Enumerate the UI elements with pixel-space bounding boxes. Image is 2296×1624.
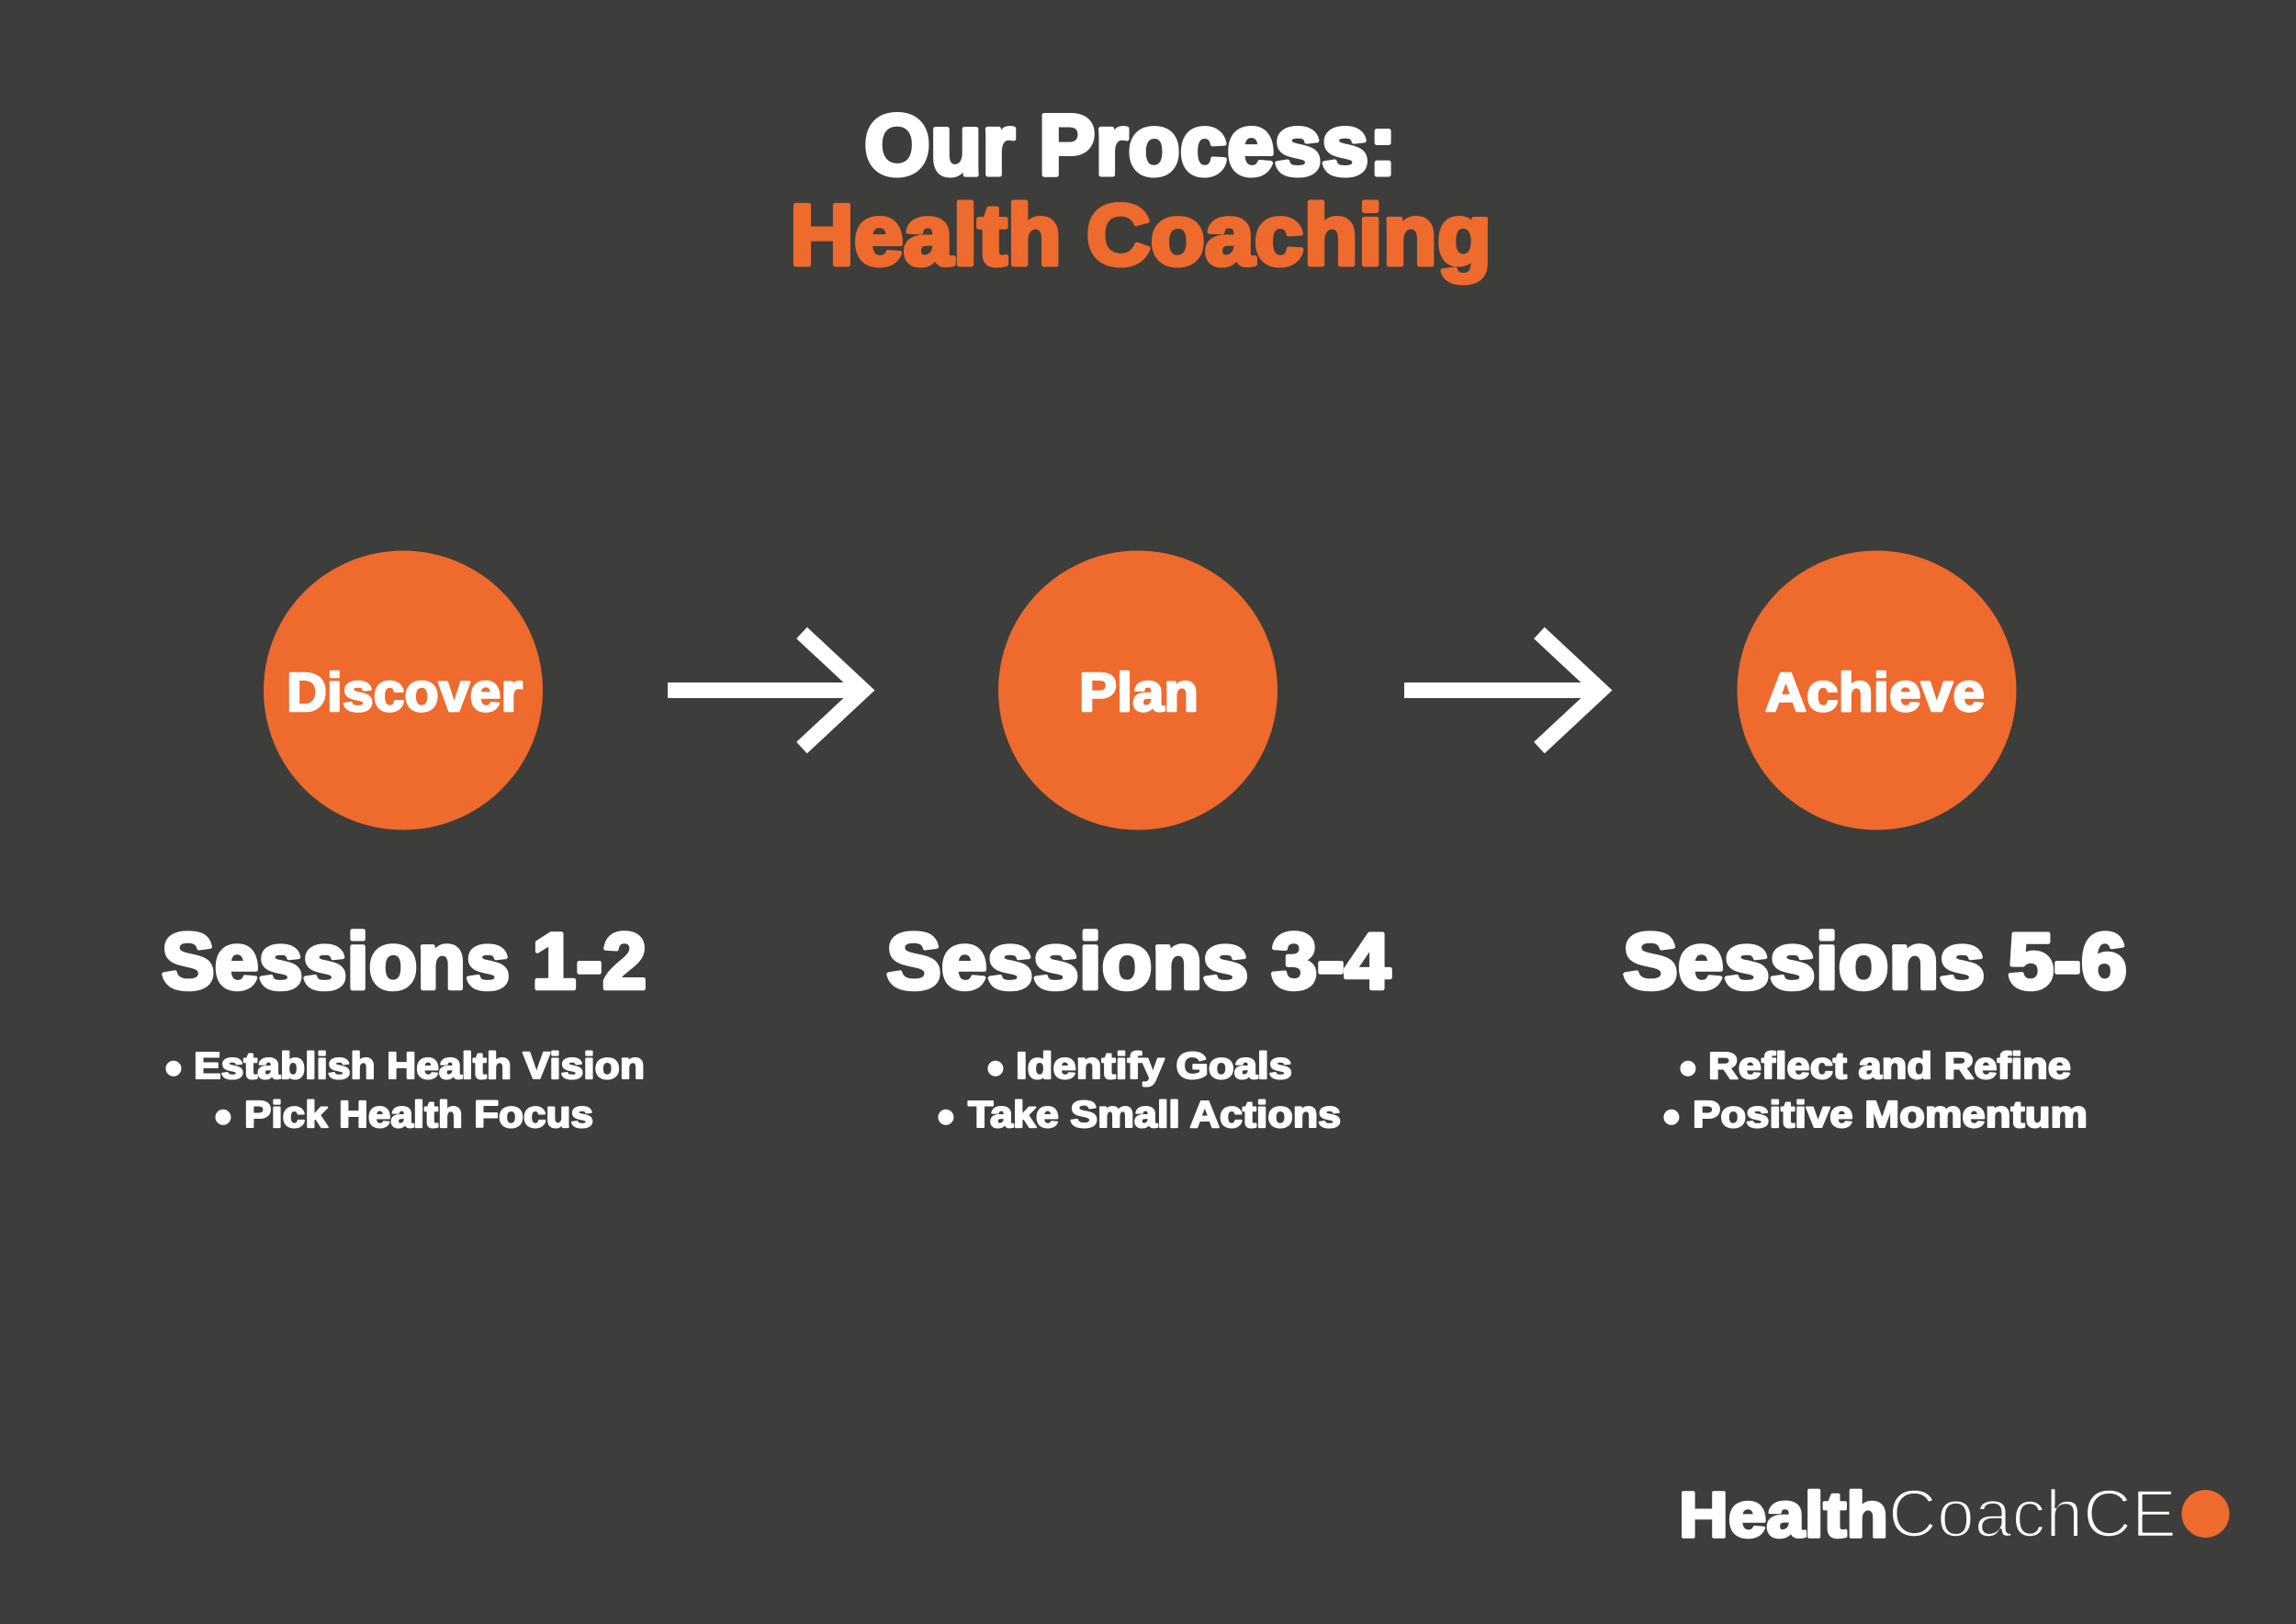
bullet list: Establish Health Vision (194, 1044, 645, 1087)
bullet list: • (215, 1089, 231, 1145)
logo word: CoachCE: CoachCE (1888, 1477, 2177, 1551)
logo word: Health: Health (1679, 1479, 1888, 1551)
step: Plan (998, 551, 1277, 830)
step: Achieve (1738, 551, 2017, 830)
heading: Sessions 1-2: Sessions 1-2 (162, 918, 647, 1006)
circle: Discover (264, 551, 543, 830)
bullet list: Positive Momentum (1693, 1093, 2088, 1135)
bullet list: Take Small Actions (968, 1093, 1341, 1135)
title (790, 96, 1491, 283)
step: Discover (264, 551, 543, 830)
title line: Health Coaching: Health Coaching (790, 186, 1491, 283)
arrow: Plan to Achieve (1404, 633, 1601, 748)
bullet list: Pick Health Focus (244, 1093, 593, 1135)
bullet list: • (165, 1041, 182, 1096)
heading: Sessions 5-6: Sessions 5-6 (1623, 918, 2127, 1006)
bullet list: Identify Goals (1016, 1044, 1292, 1087)
title line: Our Process: Our Process: (864, 96, 1397, 193)
heading: Sessions 3-4: Sessions 3-4 (886, 918, 1390, 1006)
arrow: Discover to Plan (668, 633, 863, 748)
column: Sessions 5-6 (1623, 918, 2127, 1145)
bullet list: • (1663, 1089, 1680, 1145)
logo: HealthCoachCEO (1679, 1477, 2230, 1551)
label: Plan: Plan (1079, 662, 1199, 723)
bullet list (938, 1041, 1341, 1145)
bullet list: • (987, 1041, 1004, 1096)
column: Sessions 1-2 (162, 918, 647, 1145)
bullet list: Reflect and Refine (1708, 1044, 2071, 1087)
bullet list (165, 1041, 645, 1145)
logo dot (2182, 1490, 2230, 1538)
label: Achieve: Achieve (1765, 662, 1985, 723)
circle: Achieve (1738, 551, 2017, 830)
circle: Plan (998, 551, 1277, 830)
bullet list (1663, 1041, 2088, 1145)
column: Sessions 3-4 (886, 918, 1390, 1145)
label: Discover: Discover (287, 662, 523, 723)
bullet list: • (938, 1089, 954, 1145)
bullet list: • (1680, 1041, 1696, 1096)
